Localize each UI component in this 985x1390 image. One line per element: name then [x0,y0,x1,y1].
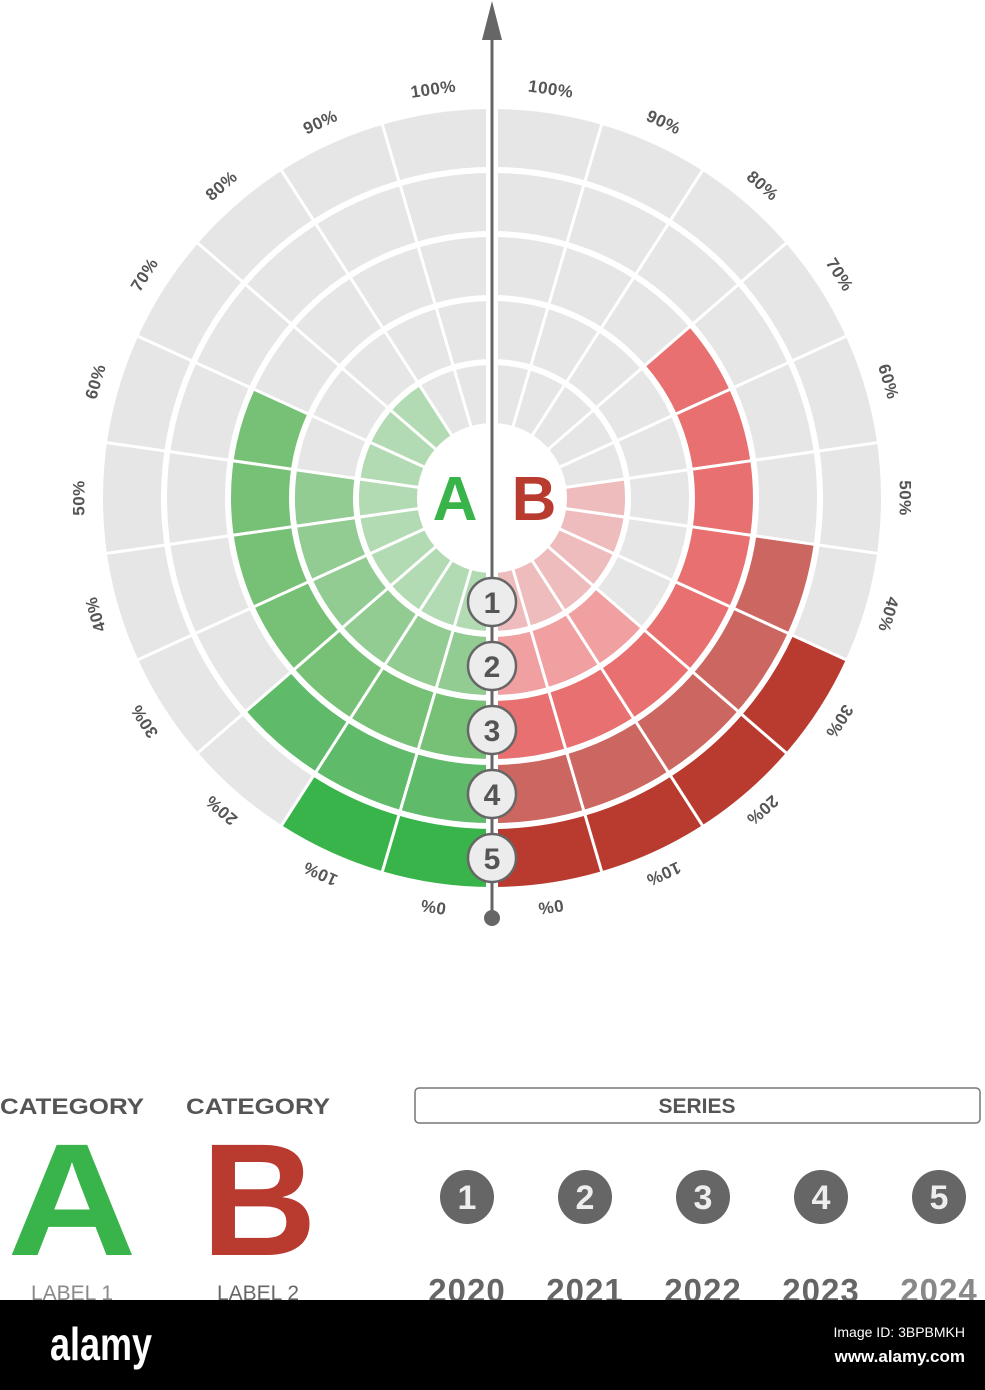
red series B [492,346,820,858]
series number markers [468,578,516,882]
legend: categories: CATEGORY [0,1094,144,1119]
percentage labels left: 20% [202,791,241,829]
series number markers: 3 [484,715,500,748]
series number markers: 5 [484,843,500,876]
legend: categories: LABEL 1 [31,1282,113,1305]
center letters: A [433,465,477,534]
legend: series: 2 [576,1179,594,1217]
legend: series: 5 [930,1179,948,1217]
legend: series: 2020 [428,1272,506,1309]
percentage labels left: 80% [202,167,241,205]
percentage labels right: 100% [527,77,575,102]
percentage labels left: 50% [69,480,88,516]
legend: categories: CATEGORY [186,1094,330,1119]
legend: series: 1 [458,1179,476,1217]
legend: series: 2023 [782,1272,860,1309]
legend: series: 4 [812,1179,831,1217]
percentage labels right [527,77,915,918]
percentage labels left: 40% [82,595,110,634]
legend: series: 2021 [546,1272,624,1309]
series number markers: 2 [484,651,500,684]
radial chart [69,1,915,926]
percentage labels right: 90% [643,106,684,138]
series number markers: 4 [484,779,501,812]
percentage labels right: 70% [822,255,857,295]
legend: categories: LABEL 2 [217,1282,299,1305]
legend: categories: B [201,1110,317,1289]
percentage labels right: 0% [537,896,565,918]
percentage labels right: 80% [743,167,782,205]
legend: series: SERIES [658,1095,736,1118]
gray ring backgrounds [132,138,852,858]
percentage labels left [69,77,457,918]
percentage labels left: 90% [300,106,341,138]
percentage labels left: 0% [419,896,447,918]
percentage labels left: 70% [127,255,162,295]
series number markers: 1 [484,587,500,620]
watermark band [0,1300,985,1390]
watermark band: www.alamy.com [834,1347,965,1366]
legend: series [415,1088,980,1309]
percentage labels right: 30% [822,701,857,741]
legend: series: 2024 [900,1272,978,1309]
percentage labels left: 10% [300,858,341,890]
watermark band: alamy [50,1318,152,1370]
legend: categories: A [7,1110,137,1289]
watermark band: Image ID: 3BPBMKH [834,1324,965,1340]
percentage labels right: 60% [874,362,902,401]
arrow axis [482,1,502,926]
percentage labels left: 30% [127,701,162,741]
legend: series: 2022 [664,1272,742,1309]
legend: categories [0,1094,330,1305]
percentage labels right: 40% [874,595,902,634]
percentage labels right: 20% [743,791,782,829]
center letters [433,465,556,534]
percentage labels right: 10% [643,858,684,890]
percentage labels left: 100% [409,77,457,102]
green series A [260,402,492,858]
percentage labels right: 50% [896,480,915,516]
legend: series: 3 [694,1179,712,1217]
percentage labels left: 60% [82,362,110,401]
center letters: B [512,465,556,534]
